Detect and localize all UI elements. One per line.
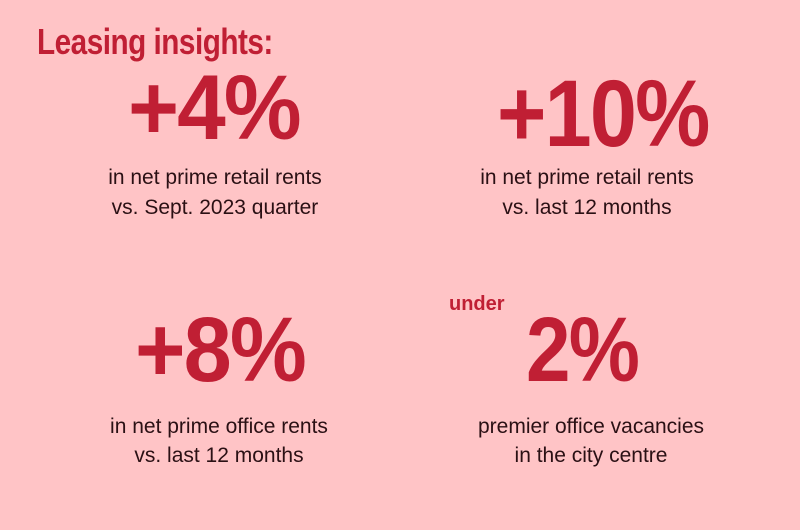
description [110, 415, 328, 467]
title: Leasing insights: [37, 21, 273, 62]
description: in net prime retail rents [108, 166, 322, 189]
description: in net prime retail rents [480, 166, 694, 189]
description: vs. last 12 months [134, 444, 304, 467]
stat: +4% retail rents vs. quarter [108, 57, 322, 219]
number: +4%: +4% [128, 57, 300, 159]
number: 2%: 2% [526, 299, 638, 401]
description: in the city centre [515, 444, 667, 467]
label: under: under [449, 293, 505, 315]
description [108, 166, 322, 219]
description: in net prime office rents [110, 415, 328, 438]
description: premier office vacancies [478, 415, 704, 438]
description: vs. Sept. 2023 quarter [112, 196, 318, 219]
number: +8%: +8% [135, 299, 305, 401]
description [480, 166, 694, 219]
stat: +8% office rents [110, 299, 328, 467]
stat: under 2% office vacancies [449, 293, 704, 467]
stat: +10% retail rents vs. 12 months [480, 61, 708, 219]
description: vs. last 12 months [502, 196, 672, 219]
description [478, 415, 704, 467]
number: +10%: +10% [497, 61, 708, 167]
